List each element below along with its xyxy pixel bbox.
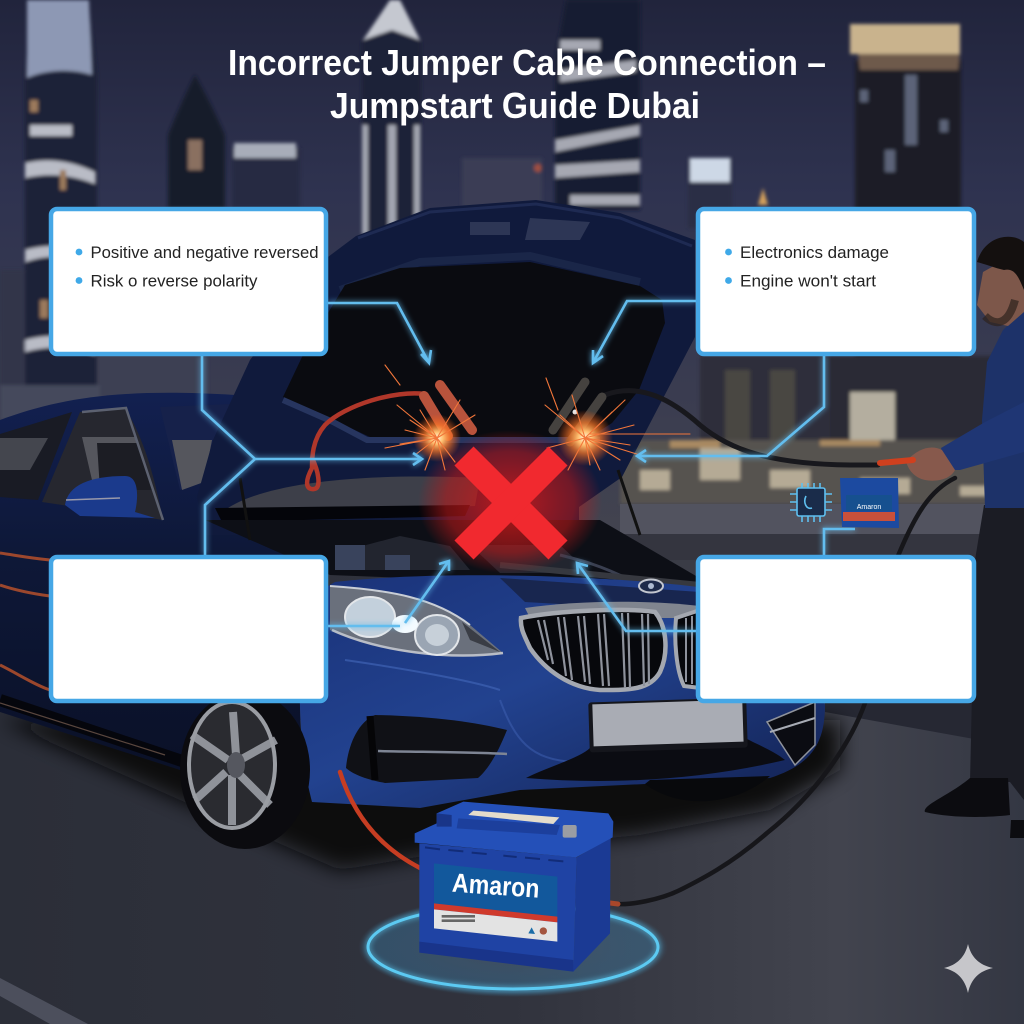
arrow: lower right panel to engine — [577, 563, 696, 631]
connector: small battery to lower right panel — [824, 529, 855, 555]
front and rear wheels — [180, 691, 770, 849]
title: Incorrect Jumper Cable Connection – — [228, 42, 826, 83]
kidney grille — [521, 610, 700, 690]
glowing ring under battery — [358, 897, 668, 997]
Amaron battery: Amaron — [451, 868, 540, 904]
icon: chip — [790, 483, 832, 522]
arrow: left panels to red clamp spark — [202, 356, 422, 555]
title — [228, 42, 826, 126]
icon: side mirror — [65, 476, 155, 518]
small battery: Amaron — [857, 504, 881, 511]
bullet: positive and negative reversed: Positive and negative reversed — [90, 243, 318, 262]
arrow: lower left panel to headlight — [328, 561, 449, 626]
small battery — [840, 478, 899, 528]
headlight — [330, 586, 503, 655]
car: open hood — [197, 200, 695, 535]
red X mark — [464, 456, 558, 550]
background: night city skyline — [0, 0, 1024, 564]
title: Jumpstart Guide Dubai — [330, 85, 700, 126]
bullet: engine won't start: Engine won't start — [740, 272, 876, 290]
engine bay — [205, 470, 720, 590]
bullet: risk of reverse polarity: Risk o reverse polarity — [90, 272, 258, 290]
car: side body and cabin — [0, 393, 300, 790]
panel: lower right callout — [698, 557, 974, 701]
bullet: electronics damage: Electronics damage — [740, 243, 889, 262]
panel: top left callout — [51, 209, 326, 354]
car: front body and bumper — [300, 575, 825, 808]
license plate — [588, 698, 748, 752]
Amaron battery — [415, 802, 613, 972]
black clamp — [553, 382, 602, 442]
arrow: top right panel to black clamp — [593, 301, 696, 363]
icon: sparkle watermark — [944, 944, 993, 993]
arrow: top left panel to red clamp — [328, 303, 431, 363]
person holding cable — [906, 237, 1024, 838]
ground: asphalt — [0, 560, 1024, 1024]
jumper cables — [307, 391, 955, 904]
arrow: right panel to black clamp spark — [637, 356, 824, 462]
red glow behind cross — [418, 430, 602, 574]
panel: lower left callout — [51, 557, 326, 701]
sparks — [385, 365, 690, 470]
red clamp — [424, 385, 472, 436]
panel: top right callout — [698, 209, 974, 354]
lower bumper intakes — [346, 702, 815, 783]
connector lines and arrows — [202, 301, 855, 631]
